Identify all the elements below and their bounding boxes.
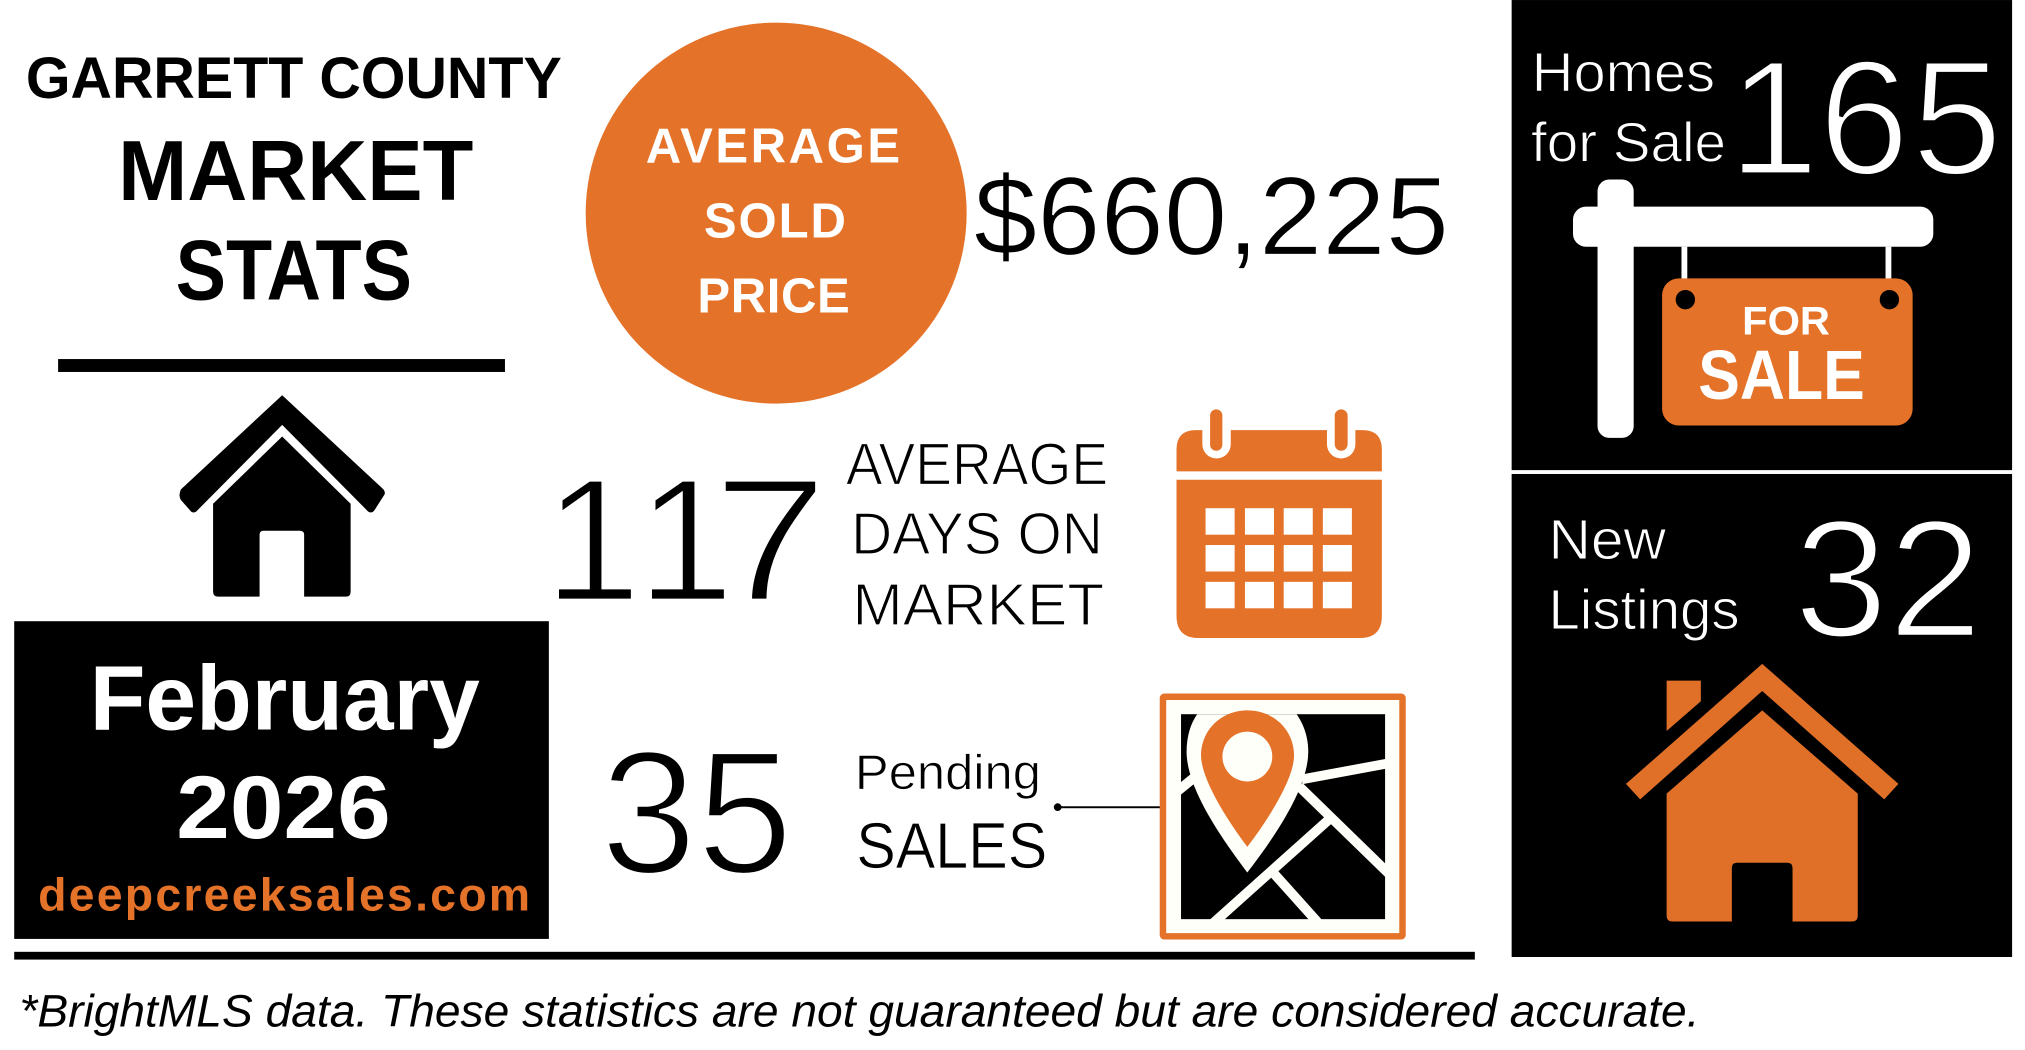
days on market label [846,430,1108,638]
average sold price badge: SOLD [704,195,846,249]
label: for Sale [1531,111,1726,173]
average sold price value: $660,225 [974,153,1449,278]
icon: for sale sign [1573,180,1933,438]
label [1531,42,1726,173]
title [26,46,562,319]
days on market value: 1 [544,443,641,639]
title: MARKET [118,124,473,219]
website: deepcreeksales.com [38,868,530,920]
days on market value [544,443,828,639]
icon: orange house [1626,664,1898,921]
panel: month and website [14,621,549,939]
value: 32 [1794,485,1982,673]
pending sales value: 35 [601,715,793,911]
average sold price badge: AVERAGE [646,120,900,174]
pending sales label: Pending [855,746,1041,800]
month: February [90,648,480,750]
icon: black house [180,395,385,597]
days on market value: 7 [713,443,828,639]
panel: new listings [1512,474,2012,957]
icon: map with pin [1163,697,1403,936]
label [1548,509,1740,642]
year: 2026 [176,757,391,857]
pending sales label: SALES [856,810,1047,882]
pending sales label [855,746,1047,882]
days on market label: AVERAGE [846,430,1108,497]
title: GARRETT COUNTY [26,46,562,111]
icon: for sale sign: SALE [1698,336,1865,414]
label: Homes [1532,42,1715,104]
days on market label: DAYS ON [851,500,1103,567]
average sold price badge [586,23,967,404]
title: STATS [176,224,412,319]
icon: calendar [1177,409,1382,638]
label: Listings [1548,579,1740,642]
panel: homes for sale [1512,0,2012,470]
footnote: *BrightMLS data. These statistics are not guaranteed but are considered accurate. [19,986,1700,1037]
label: New [1548,509,1667,572]
value: 165 [1728,26,2003,209]
days on market label: MARKET [852,571,1104,638]
icon: for sale sign: FOR [1742,300,1830,344]
days on market value: 1 [637,443,734,639]
average sold price badge: PRICE [697,270,850,324]
callout connector [1054,803,1161,811]
